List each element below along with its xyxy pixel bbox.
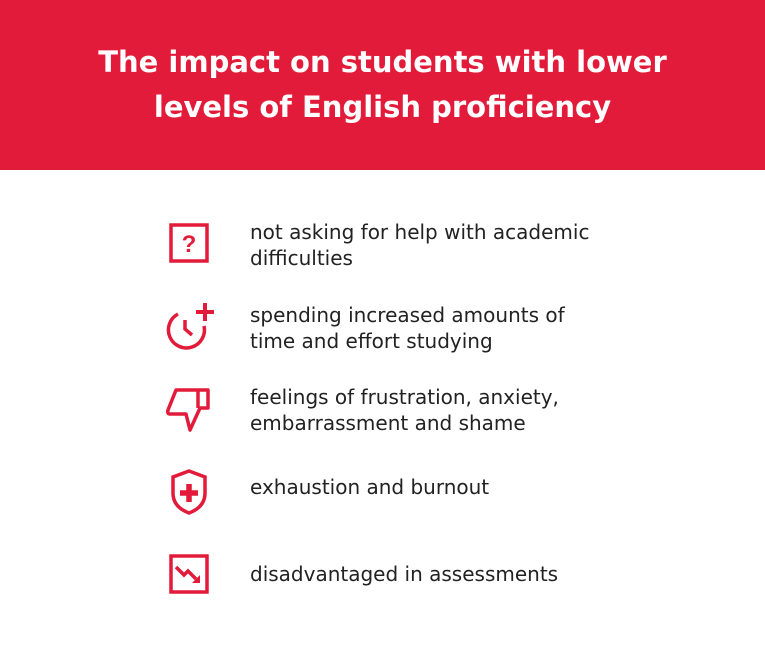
icon: chart down — [169, 554, 209, 594]
text 3 — [250, 385, 559, 435]
text 1: not asking for help with academic — [250, 220, 589, 244]
title: The impact on students with lower — [98, 45, 667, 79]
icon: shield cross — [171, 469, 207, 515]
text 1: difficulties — [250, 246, 353, 270]
title — [98, 45, 667, 124]
text 2: time and effort studying — [250, 329, 493, 353]
text 5: disadvantaged in assessments — [250, 562, 558, 586]
text 3: feelings of frustration, anxiety, — [250, 385, 559, 409]
icon: question box — [169, 223, 209, 263]
text 4: exhaustion and burnout — [250, 475, 489, 499]
text 2: spending increased amounts of — [250, 303, 565, 327]
text 1 — [250, 220, 589, 270]
text 3: embarrassment and shame — [250, 411, 526, 435]
text 2 — [250, 303, 566, 353]
header banner — [0, 0, 765, 170]
title: levels of English proficiency — [154, 90, 611, 124]
icon: thumbs down — [166, 388, 210, 432]
icon: question box: ? — [182, 231, 196, 258]
icon: clock plus — [166, 303, 214, 350]
